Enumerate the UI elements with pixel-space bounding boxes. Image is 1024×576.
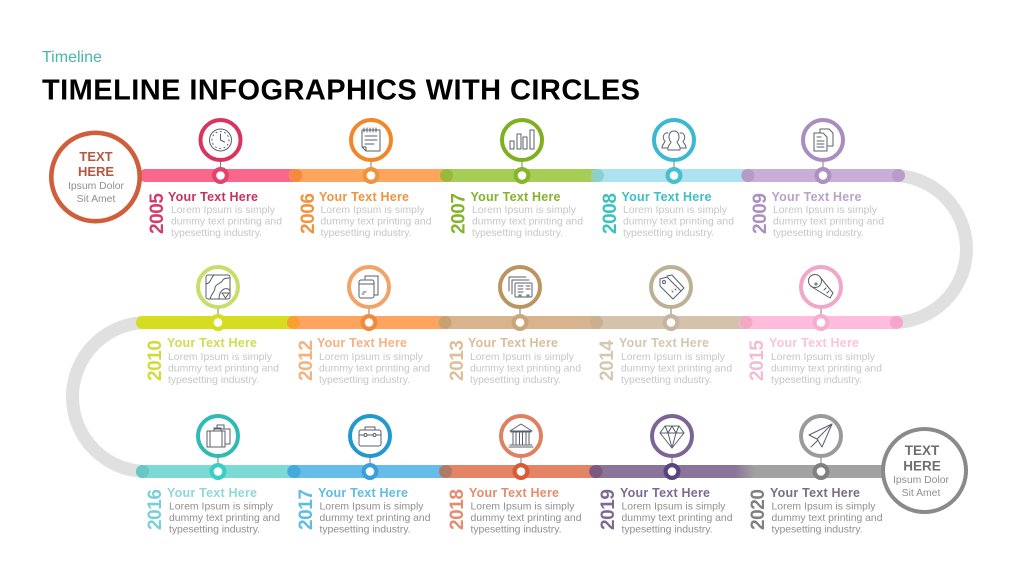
milestone 2020	[748, 416, 883, 536]
milestone 2019: 2019	[598, 489, 619, 530]
milestone 2009: 2009	[750, 193, 771, 234]
milestone 2016: typesetting industry.	[169, 524, 260, 536]
icon: diamond	[660, 426, 684, 448]
milestone 2009: dummy text printing and	[773, 216, 884, 228]
milestone 2015: 2015	[747, 340, 768, 381]
icon: clock	[210, 129, 232, 151]
milestone 2006: Lorem Ipsum is simply	[320, 205, 425, 216]
icon: tags	[660, 275, 684, 299]
icon: map	[206, 275, 230, 299]
milestone 2005: 2005	[147, 193, 168, 234]
milestone 2012: Lorem Ipsum is simply	[319, 352, 424, 363]
start circle: Sit Amet	[77, 194, 115, 205]
milestone 2019: typesetting industry.	[622, 524, 712, 536]
milestone 2020: 2020	[748, 489, 769, 530]
icon: package	[359, 276, 378, 298]
end circle: HERE	[903, 458, 941, 474]
end circle: TEXT	[905, 443, 940, 458]
milestone 2014: Lorem Ipsum is simply	[621, 352, 726, 363]
milestone 2006: Your Text Here	[319, 190, 409, 204]
milestone 2009: typesetting industry.	[773, 228, 864, 239]
milestone 2012	[296, 267, 430, 386]
left curved connector	[73, 322, 147, 472]
milestone 2006	[298, 120, 432, 239]
milestone 2006: typesetting industry.	[320, 228, 412, 239]
milestone 2017: Your Text Here	[318, 486, 408, 500]
milestone 2007: dummy text printing and	[472, 216, 583, 228]
milestone 2008	[600, 120, 734, 239]
icon: cards	[509, 277, 532, 297]
milestone 2013: typesetting industry.	[470, 375, 561, 386]
milestone 2020: dummy text printing and	[772, 513, 883, 524]
row 3 milestones	[145, 416, 883, 536]
milestone 2012: 2012	[296, 340, 317, 381]
timeline bar: row 3	[136, 465, 890, 478]
milestone 2010	[145, 267, 279, 386]
title: TIMELINE INFOGRAPHICS WITH CIRCLES	[42, 74, 640, 106]
milestone 2013: Your Text Here	[468, 336, 558, 350]
icon: documents	[814, 129, 833, 151]
milestone 2007: typesetting industry.	[472, 228, 563, 239]
start circle: Ipsum Dolor	[68, 181, 125, 192]
timeline bar: row 1	[139, 169, 905, 182]
milestone 2018: typesetting industry.	[470, 524, 562, 536]
milestone 2016: 2016	[145, 489, 166, 530]
milestone 2016: dummy text printing and	[169, 513, 280, 524]
milestone 2007: Lorem Ipsum is simply	[472, 205, 577, 216]
milestone 2014: 2014	[597, 340, 618, 381]
milestone 2010: 2010	[145, 340, 166, 381]
milestone 2019: Your Text Here	[620, 486, 710, 500]
milestone 2020: Your Text Here	[770, 486, 860, 500]
milestone 2013: dummy text printing and	[470, 364, 581, 374]
milestone 2020: Lorem Ipsum is simply	[772, 502, 876, 512]
milestone 2009: Your Text Here	[772, 190, 862, 204]
milestone 2008: Your Text Here	[622, 190, 712, 204]
milestone 2008: 2008	[600, 193, 621, 234]
milestone 2013: Lorem Ipsum is simply	[470, 352, 575, 363]
row 1 milestones	[147, 120, 884, 239]
milestone 2008: typesetting industry.	[623, 228, 714, 239]
milestone 2007: 2007	[448, 193, 470, 234]
milestone 2016	[145, 416, 280, 536]
milestone 2016: Your Text Here	[167, 486, 257, 500]
subtitle: Timeline	[42, 49, 102, 66]
milestone 2010: dummy text printing and	[168, 364, 279, 374]
icon: briefcase	[359, 427, 381, 446]
timeline bar: row 2	[136, 316, 903, 329]
milestone 2014: typesetting industry.	[621, 375, 712, 386]
milestone 2014: Your Text Here	[619, 336, 709, 350]
icon: people	[662, 131, 686, 150]
milestone 2013: 2013	[447, 340, 468, 381]
milestone 2018: Your Text Here	[469, 486, 559, 500]
milestone 2005: dummy text printing and	[171, 216, 282, 228]
milestone 2005: Lorem Ipsum is simply	[171, 205, 276, 216]
milestone 2015: dummy text printing and	[771, 364, 882, 374]
milestone 2013	[447, 267, 581, 386]
icon: suitcases	[207, 425, 230, 447]
end circle: Ipsum Dolor	[893, 475, 950, 486]
milestone 2019	[598, 416, 733, 536]
end circle: Sit Amet	[902, 488, 940, 499]
icon: notepad	[362, 128, 380, 151]
milestone 2015: Lorem Ipsum is simply	[771, 352, 876, 363]
milestone 2006: dummy text printing and	[320, 216, 432, 228]
milestone 2010: Lorem Ipsum is simply	[168, 352, 273, 363]
milestone 2018: 2018	[447, 489, 468, 530]
milestone 2017: typesetting industry.	[320, 524, 410, 536]
icon: bar chart	[510, 130, 534, 149]
milestone 2017: 2017	[296, 489, 317, 530]
milestone 2017	[296, 416, 431, 536]
start circle	[51, 133, 140, 221]
milestone 2010: typesetting industry.	[168, 375, 259, 386]
milestone 2018: dummy text printing and	[470, 513, 582, 524]
milestone 2009: Lorem Ipsum is simply	[773, 205, 878, 216]
milestone 2019: dummy text printing and	[622, 513, 733, 524]
milestone 2005: typesetting industry.	[171, 228, 262, 239]
milestone 2012: dummy text printing and	[319, 364, 430, 374]
milestone 2005	[147, 120, 282, 239]
milestone 2017: dummy text printing and	[320, 513, 431, 524]
milestone 2009	[750, 120, 884, 239]
milestone 2007: Your Text Here	[470, 190, 561, 204]
icon: bank	[509, 424, 533, 447]
milestone 2018	[447, 416, 582, 536]
row 2 milestones	[145, 267, 882, 386]
milestone 2007	[448, 120, 583, 239]
milestone 2006: 2006	[298, 193, 319, 234]
milestone 2020: typesetting industry.	[772, 524, 862, 536]
end circle	[883, 429, 966, 512]
milestone 2012: Your Text Here	[317, 336, 407, 350]
start circle: HERE	[78, 164, 114, 179]
milestone 2008: dummy text printing and	[623, 216, 734, 228]
start circle: TEXT	[79, 149, 113, 164]
right curved connector	[893, 176, 966, 322]
milestone 2012: typesetting industry.	[319, 375, 410, 386]
milestone 2015: typesetting industry.	[771, 375, 862, 386]
milestone 2014: dummy text printing and	[621, 364, 732, 374]
milestone 2010: Your Text Here	[167, 336, 257, 350]
milestone 2016: Lorem Ipsum is simply	[169, 502, 274, 512]
milestone 2018: Lorem Ipsum is simply	[470, 502, 575, 512]
milestone 2015: Your Text Here	[769, 336, 859, 350]
milestone 2017: Lorem Ipsum is simply	[320, 502, 424, 512]
milestone 2005: Your Text Here	[168, 190, 258, 204]
icon: paper plane	[809, 424, 832, 447]
milestone 2014	[597, 267, 732, 386]
icon: key	[808, 274, 833, 298]
milestone 2008: Lorem Ipsum is simply	[623, 205, 728, 216]
milestone 2019: Lorem Ipsum is simply	[622, 502, 726, 512]
milestone 2015	[747, 267, 882, 386]
